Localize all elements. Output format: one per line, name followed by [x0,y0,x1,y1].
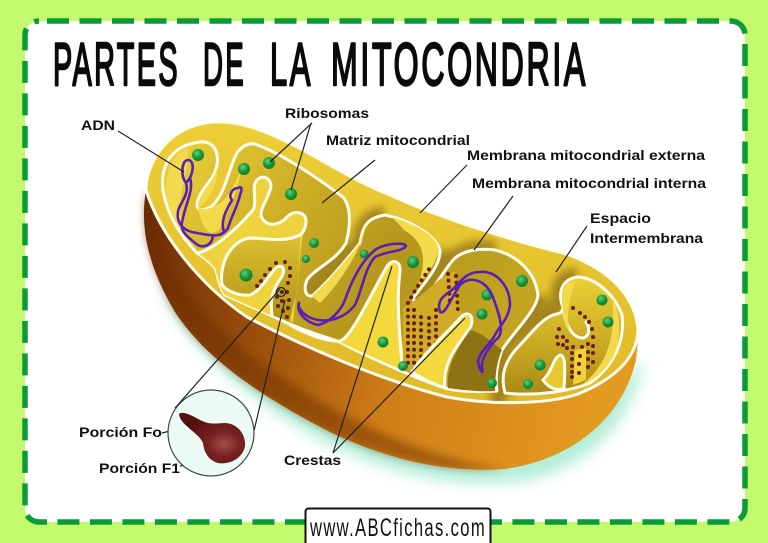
soft shadow [160,290,645,483]
labels: Membrana mitocondrial externa [467,147,705,163]
rim inner shadow [305,215,577,392]
DNA strand: right [439,272,510,372]
labels [79,105,706,476]
rising crista edge [197,177,306,253]
right lobe wall left [562,281,576,332]
right lobe [503,277,623,394]
title [53,31,588,98]
particles: cluster 1 [255,260,292,319]
crista edge [290,261,402,366]
lower-left lobe edge [222,235,300,315]
right lobe lower bump [543,355,565,389]
labels: Ribosomas [285,105,369,121]
footer badge: www.ABCfichas.com [309,514,486,542]
right lobe rib [573,348,586,385]
rising crista wall [197,177,306,322]
top crista yellow wall [312,224,366,303]
labels: Porción F1 [99,460,180,476]
inset: ATP synthase particle [168,288,286,476]
labels: Matriz mitocondrial [326,132,470,148]
title: LA [270,31,313,98]
matrix / inner membrane [163,142,538,392]
right lobe crista [563,305,589,338]
mitochondrion illustration [144,122,645,483]
body darker lower edge [144,190,505,470]
crista wall 1 [198,168,241,233]
title: PARTES [53,31,180,98]
labels: Intermembrana [590,230,703,246]
particles: cluster 2 [408,265,458,370]
DNA strand: left [178,160,241,246]
leader lines [118,123,587,466]
particles: cluster 3 [555,306,595,379]
labels: Membrana mitocondrial interna [472,175,706,191]
labels: Crestas [284,452,341,468]
labels: Porción Fo [79,424,162,440]
ribosomes [192,149,614,389]
right lobe side wall [580,297,619,386]
crista from bottom, lobe 3 [412,314,472,388]
crista from bottom, bright yellow [340,261,406,372]
lobe 3 shade [448,330,502,391]
lobe 2 yellow wall [392,217,439,288]
left lobe yellow wall [166,148,197,250]
outer rim face [146,122,638,403]
outer membrane body [144,190,639,470]
labels: Espacio [590,210,651,226]
rim white edge [146,122,638,403]
title: DE [203,31,246,98]
footer badge [306,508,490,543]
lower-left lobe [222,235,300,322]
DNA strand: centre [298,244,406,325]
labels: ADN [81,117,115,133]
face behind cluster 2 [403,272,462,372]
